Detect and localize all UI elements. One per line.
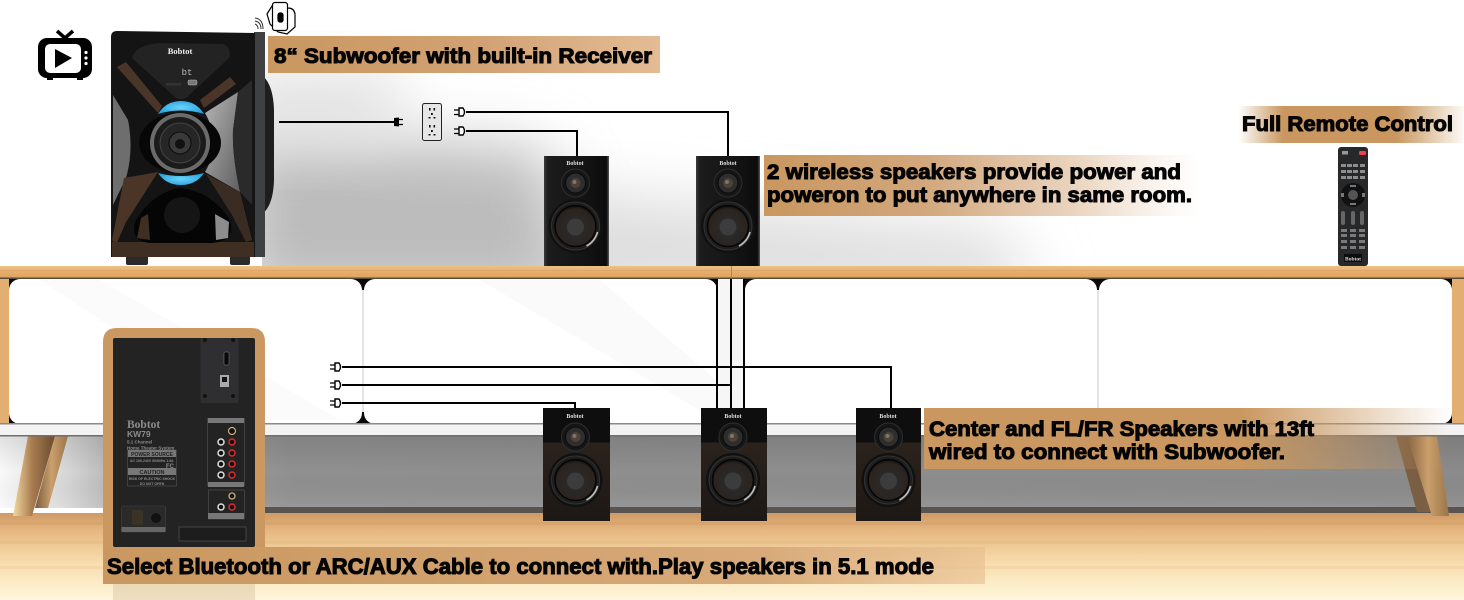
TV cabinet — [0, 266, 1464, 436]
model labels: KW79 — [127, 429, 151, 439]
wired speaker cables — [330, 279, 891, 408]
wired speaker: center: Bobtot — [724, 414, 742, 420]
subwoofer rear panel — [103, 328, 265, 556]
blue light top — [158, 101, 204, 114]
icon: wireless waves — [255, 18, 263, 29]
icon: hand holding phone with bluetooth — [267, 2, 295, 34]
caption: subwoofer: 8“ Subwoofer with built-in Receiver — [274, 45, 652, 68]
caption: wired speakers — [924, 408, 1450, 469]
wireless speaker left: Bobtot — [566, 161, 584, 167]
lower wall behind cabinet — [0, 436, 1464, 514]
wireless speaker power cables — [454, 108, 728, 156]
caption: wireless speakers — [764, 155, 1224, 216]
icon: power outlet — [422, 104, 442, 140]
wireless speaker right: Bobtot — [719, 161, 737, 167]
icon: TV with play button — [38, 31, 92, 80]
front panel — [111, 31, 255, 257]
control dial — [139, 113, 221, 173]
remote control — [1338, 147, 1368, 266]
model labels: 5.1 Channel — [127, 440, 152, 444]
wired speaker: left: Bobtot — [566, 414, 584, 420]
caption: wired speakers: Center and FL/FR Speakers with 13ft — [929, 418, 1314, 441]
model labels: DO NOT OPEN — [140, 482, 165, 486]
model labels: RISK OF ELECTRIC SHOCK — [129, 477, 176, 481]
USB and card slot — [166, 80, 197, 86]
display: bt — [182, 68, 192, 78]
wooden floor — [0, 513, 1464, 600]
model labels — [127, 419, 176, 486]
bottom label slot — [179, 527, 246, 541]
caption: subwoofer — [268, 36, 660, 73]
wired speaker: right: Bobtot — [879, 414, 897, 420]
wireless speaker left — [544, 156, 609, 266]
caption: wired speakers: wired to connect with Subwoofer. — [928, 441, 1285, 464]
audio output jacks — [208, 490, 244, 519]
remote control: Bobtot — [1345, 256, 1361, 262]
model labels: AC 100-240V 50/60Hz 1.5A — [130, 459, 174, 463]
model labels: Bobtot — [127, 419, 160, 431]
cabinet legs — [13, 436, 1449, 516]
HDMI and optical plate — [200, 338, 238, 403]
blue light bottom — [158, 173, 204, 185]
caption: bluetooth and cable — [103, 547, 985, 584]
wired speaker: right — [856, 408, 921, 521]
wired speaker: left — [543, 408, 610, 521]
model labels: POWER SOURCE — [131, 452, 173, 458]
power cable from subwoofer — [279, 118, 403, 126]
wired speaker: center — [701, 408, 767, 521]
caption: wireless speakers: poweron to put anywhere in same room. — [767, 184, 1192, 207]
input jacks — [208, 418, 244, 487]
model labels: Home Theater System — [127, 446, 174, 450]
subwoofer with built-in receiver — [111, 31, 274, 265]
subwoofer feet — [126, 255, 250, 265]
logo: Bobtot — [168, 46, 192, 56]
wireless speaker right — [696, 156, 760, 266]
power switch — [122, 506, 166, 532]
caption: remote — [1238, 106, 1464, 143]
caption: wireless speakers: 2 wireless speakers provide power and — [767, 161, 1181, 184]
rear panel floor reflection — [113, 584, 255, 600]
model labels: CAUTION — [139, 470, 165, 476]
side bulge — [256, 72, 274, 217]
side panel — [254, 32, 265, 257]
lower arch trim — [112, 172, 158, 245]
model labels: FC — [166, 464, 175, 470]
wall background — [262, 58, 1034, 266]
caption: bluetooth and cable: Select Bluetooth or ARC/AUX Cable to connect with.Play speakers in 5.1 mode — [107, 554, 934, 579]
caption: remote: Full Remote Control — [1242, 113, 1453, 136]
